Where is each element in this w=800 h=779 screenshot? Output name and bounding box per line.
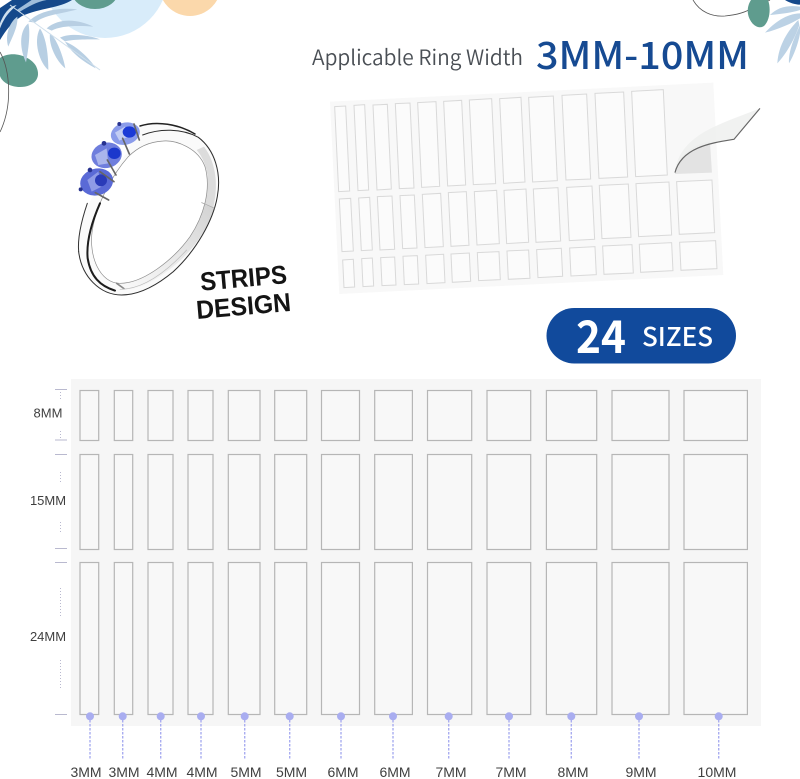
width markers: dots and dashed leaders <box>86 712 723 760</box>
illustration: silver ring with three blue stones <box>77 119 219 295</box>
row: 8MM strips <box>80 390 747 440</box>
ring lower band shading <box>119 203 214 289</box>
ring stones <box>77 119 142 200</box>
heading: applicable ring width <box>312 25 749 80</box>
row: 15MM strips <box>80 454 747 550</box>
decoration: top-left foliage and circles <box>0 0 221 132</box>
label: strips design: DESIGN <box>195 287 292 325</box>
badge: 24 sizes <box>546 301 736 366</box>
width labels <box>70 764 736 779</box>
heading label: Applicable Ring Width <box>312 42 523 72</box>
row: 24MM strips <box>80 562 747 714</box>
label: strips design: STRIPS <box>199 259 288 297</box>
height scale: tick marks and labels <box>30 390 67 714</box>
panel: size chart <box>71 379 761 726</box>
badge: 24 sizes: 24 <box>576 301 626 366</box>
ring interior <box>92 141 207 283</box>
height label: 15MM: 15MM <box>30 493 66 508</box>
illustration: strip sheet with peeling corner <box>330 83 760 294</box>
ring upper right inner shading <box>197 147 216 207</box>
ring outlines <box>78 123 219 295</box>
heading value: 3MM-10MM <box>536 25 749 80</box>
height label: 8MM: 8MM <box>34 406 62 420</box>
decoration: top-right foliage and line <box>693 0 800 63</box>
height label: 24MM: 24MM <box>30 629 66 644</box>
badge: 24 sizes: SIZES <box>642 317 713 354</box>
label: strips design <box>195 259 292 325</box>
